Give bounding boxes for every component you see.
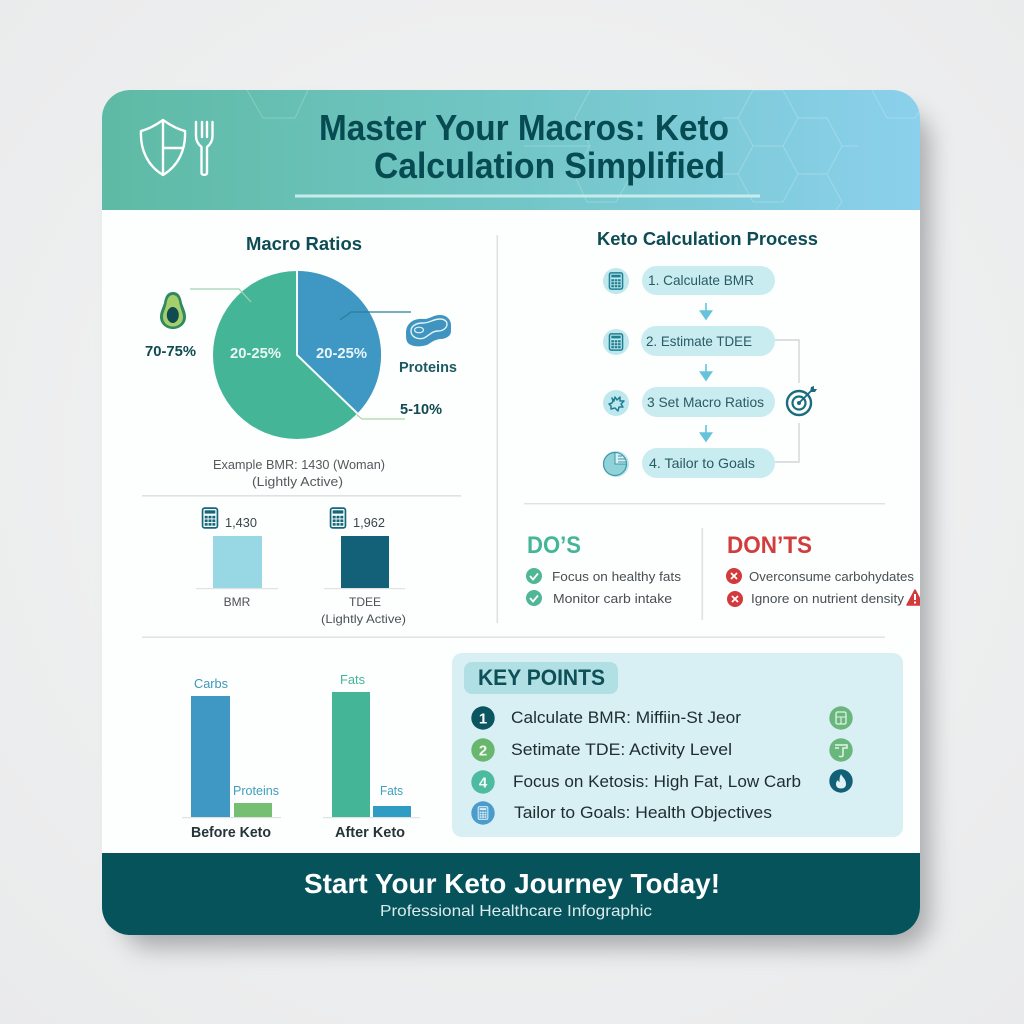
item: ignore on nutrient density: Ignore on nutrient density	[751, 591, 905, 606]
key point 2: 2	[479, 742, 487, 760]
heading: key points	[464, 662, 618, 694]
bar chart: BMR and TDEE: (Lightly Active)	[321, 612, 406, 626]
heading: process: Keto Calculation Process	[597, 228, 818, 249]
pie chart: 20-25%	[230, 346, 281, 362]
panel: keto calculation process	[597, 228, 818, 478]
icon: shield	[141, 120, 185, 175]
step 3: 3 Set Macro Ratios	[647, 394, 764, 410]
key point 2	[471, 738, 853, 762]
bar chart: BMR and TDEE: TDEE	[349, 595, 381, 609]
bar chart: before and after keto: Proteins	[233, 784, 279, 798]
header banner	[102, 90, 920, 210]
footer subtitle: Professional Healthcare Infographic	[380, 903, 652, 920]
key point 1: Calculate BMR: Miffiin-St Jeor	[511, 709, 742, 727]
step 2	[603, 326, 775, 356]
step 3	[603, 387, 775, 417]
connector to target	[775, 340, 799, 462]
step 1: 1. Calculate BMR	[648, 272, 754, 288]
key point 3: 4	[479, 774, 488, 792]
key point 4	[471, 801, 772, 825]
bar chart: BMR and TDEE: 1,430	[225, 515, 257, 530]
key point 3	[471, 769, 853, 794]
header divider line	[295, 194, 760, 198]
arrow 1	[700, 303, 712, 319]
footer headline: Start Your Keto Journey Today!	[304, 868, 720, 899]
text: example BMR	[213, 458, 385, 489]
title	[319, 107, 729, 186]
bar chart: before and after keto: Fats	[380, 784, 403, 798]
arrow 2	[700, 364, 712, 380]
label: fats percentage: 70-75%	[145, 344, 196, 360]
infographic card	[102, 90, 923, 935]
panel: do's	[526, 532, 682, 606]
item: focus on healthy fats: Focus on healthy fats	[552, 569, 682, 584]
heading: macro ratios: Macro Ratios	[246, 233, 362, 254]
bar chart: before and after keto: Fats	[340, 673, 365, 687]
key point 4: Tailor to Goals: Health Objectives	[514, 804, 772, 822]
bar chart: BMR and TDEE	[196, 508, 406, 626]
heading: key points: KEY POINTS	[478, 665, 605, 690]
bar chart: BMR and TDEE: 1,962	[353, 515, 385, 530]
arrow 3	[700, 425, 712, 441]
heading: do's: DO’S	[527, 532, 581, 559]
pie chart: 20-25%	[316, 346, 367, 362]
text: example BMR: (Lightly Active)	[252, 475, 343, 489]
icon: target	[787, 386, 817, 415]
icon: calculator BMR	[203, 508, 217, 528]
icon: calculator TDEE	[331, 508, 345, 528]
step 1	[603, 266, 775, 295]
key point 3: Focus on Ketosis: High Fat, Low Carb	[513, 773, 801, 791]
panel: don'ts	[726, 532, 923, 607]
text: example BMR: Example BMR: 1430 (Woman)	[213, 458, 385, 472]
item: monitor carb intake: Monitor carb intake	[553, 591, 672, 606]
panel: key points	[452, 653, 903, 837]
item: overconsume carbohydates: Overconsume carbohydates	[749, 569, 914, 584]
panel: macro ratios	[145, 233, 457, 489]
icon: protein steak	[406, 315, 451, 346]
bar chart: before and after keto: Carbs	[194, 677, 228, 691]
icon: fork	[196, 122, 212, 175]
bar chart: before and after keto: After Keto	[335, 825, 405, 841]
icon: warning	[907, 590, 923, 605]
step 4: 4. Tailor to Goals	[649, 455, 755, 471]
label: carbs percentage: 5-10%	[400, 402, 442, 418]
key point 2: Setimate TDE: Activity Level	[511, 741, 732, 759]
key point 1: 1	[479, 710, 487, 728]
step 2: 2. Estimate TDEE	[646, 333, 752, 349]
bar chart: before and after keto	[182, 673, 420, 841]
step 4	[603, 448, 775, 478]
pie chart	[213, 271, 381, 439]
label: proteins: Proteins	[399, 360, 457, 376]
footer banner	[102, 853, 920, 935]
leader lines	[190, 289, 411, 419]
icon: avocado	[160, 292, 186, 329]
heading: don'ts: DON’TS	[727, 532, 812, 559]
title: Calculation Simplified	[374, 145, 725, 186]
key point 1	[471, 706, 853, 730]
title: Master Your Macros: Keto	[319, 107, 729, 148]
bar chart: before and after keto: Before Keto	[191, 825, 271, 841]
bar chart: BMR and TDEE: BMR	[224, 595, 251, 609]
